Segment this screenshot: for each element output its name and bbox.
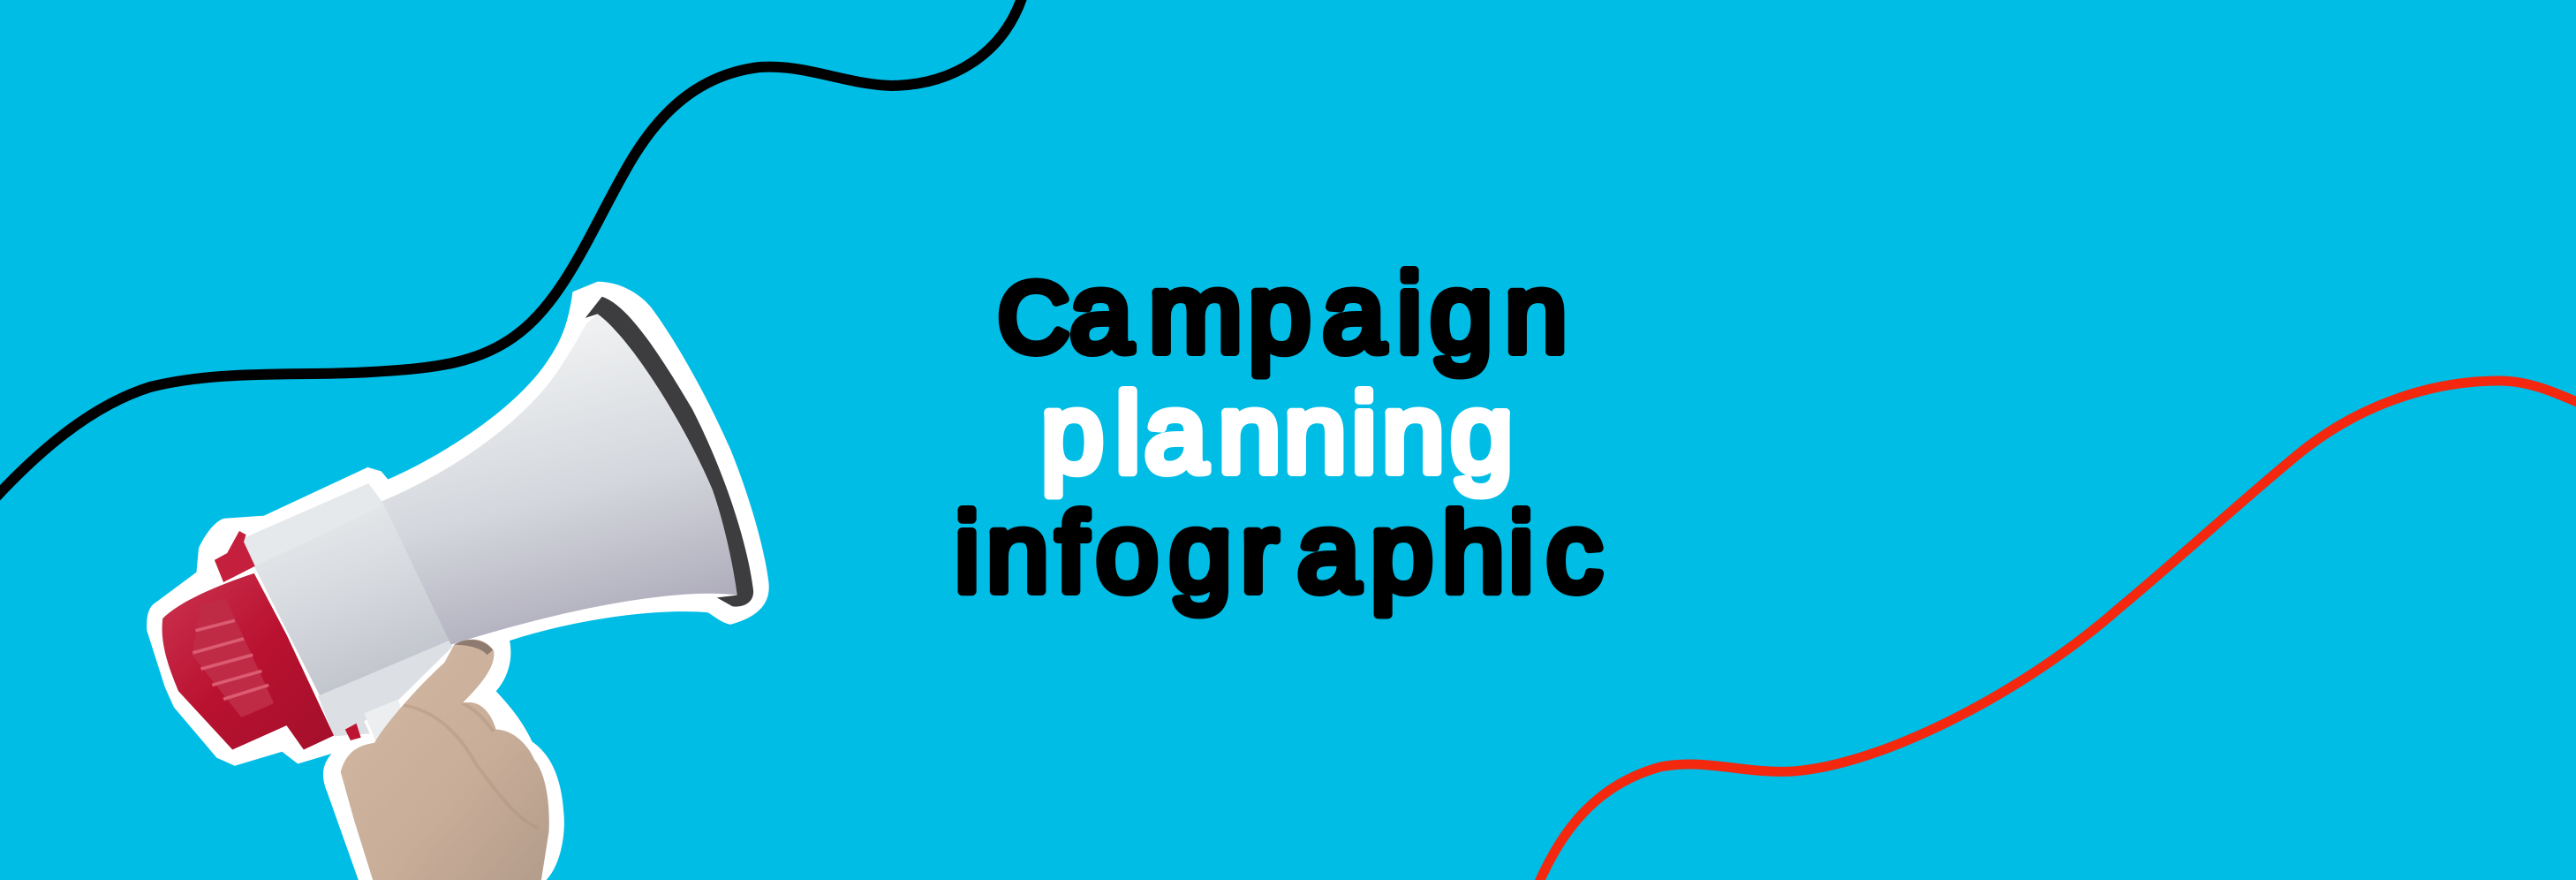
title line: infographic: infographic — [955, 489, 1602, 615]
title line: planning: planning — [1041, 370, 1513, 496]
megaphone held in a hand — [147, 282, 769, 880]
trigger — [345, 724, 361, 740]
black wavy line — [0, 0, 1022, 497]
speaker grille — [192, 598, 274, 717]
body — [242, 483, 451, 702]
red end cap — [162, 531, 361, 749]
bell rim — [585, 297, 753, 607]
red wavy line — [1539, 381, 2576, 880]
body top highlight — [242, 483, 382, 566]
cap shell — [162, 573, 334, 749]
switch — [364, 699, 402, 743]
handle base — [318, 641, 452, 736]
cap clips — [215, 531, 255, 582]
thumb shading — [454, 640, 493, 655]
bell — [381, 314, 737, 645]
hand — [341, 640, 549, 880]
white cut-out outline — [147, 282, 769, 880]
title — [955, 250, 1602, 615]
title line: Campaign: Campaign — [998, 250, 1568, 376]
grille slats — [193, 620, 268, 699]
knuckle shading — [404, 703, 539, 829]
